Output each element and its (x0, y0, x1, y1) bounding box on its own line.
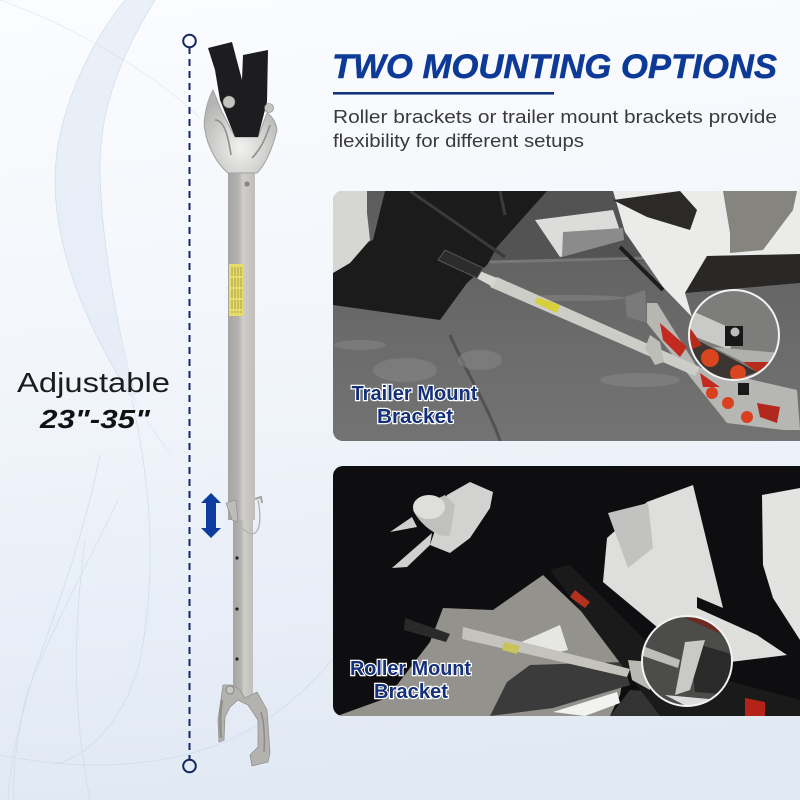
adjustable length label (17, 367, 170, 434)
support pole across road (490, 277, 700, 376)
top bolts (223, 96, 274, 112)
trailer frame with red reflectors (625, 290, 647, 323)
propeller (390, 482, 493, 568)
white plate under boat (535, 210, 623, 257)
inset circle detail (688, 290, 780, 382)
label: trailer mount bracket: Bracket (377, 406, 453, 428)
description text (333, 106, 777, 151)
black boat hull (333, 191, 547, 320)
adjustable length label: Adjustable (17, 367, 170, 398)
black V-shaped rollers (208, 42, 268, 137)
label: trailer mount bracket (352, 383, 478, 428)
white outboard lower (333, 191, 370, 273)
description text: Roller brackets or trailer mount brackets provide (333, 106, 777, 127)
hull bracket (438, 250, 483, 278)
dark trailer beam (550, 565, 800, 716)
upper tube (228, 172, 255, 520)
lower tube (233, 505, 253, 697)
label: roller mount bracket (350, 658, 471, 703)
top bracket plate (204, 90, 277, 173)
concrete ground (337, 575, 627, 716)
panel: trailer mount photo (333, 191, 800, 441)
adjustable length label: 23"-35" (39, 404, 151, 434)
description text: flexibility for different setups (333, 130, 584, 151)
dark trailer hardware (613, 191, 697, 230)
yellow warning label (229, 264, 243, 316)
white boat hull (603, 485, 787, 662)
adjustment holes (235, 181, 250, 661)
icon: blue adjust arrow (201, 493, 221, 538)
white boat hull (613, 191, 800, 317)
bottom fork bracket (218, 685, 270, 766)
road surface (333, 191, 800, 441)
support pole (462, 627, 630, 677)
title underline (333, 92, 554, 95)
label: roller mount bracket: Bracket (374, 681, 448, 703)
locking pin (226, 497, 262, 534)
label: roller mount bracket: Roller Mount (350, 658, 471, 680)
label: trailer mount bracket: Trailer Mount (352, 383, 478, 405)
panel: roller mount photo (333, 466, 800, 716)
telescopic support pole (204, 42, 277, 766)
inset circle detail (640, 615, 735, 708)
title: TWO MOUNTING OPTIONS (332, 48, 777, 86)
dimension line with end circles (183, 35, 196, 772)
dark ground right (610, 690, 660, 716)
dark background (333, 466, 800, 716)
